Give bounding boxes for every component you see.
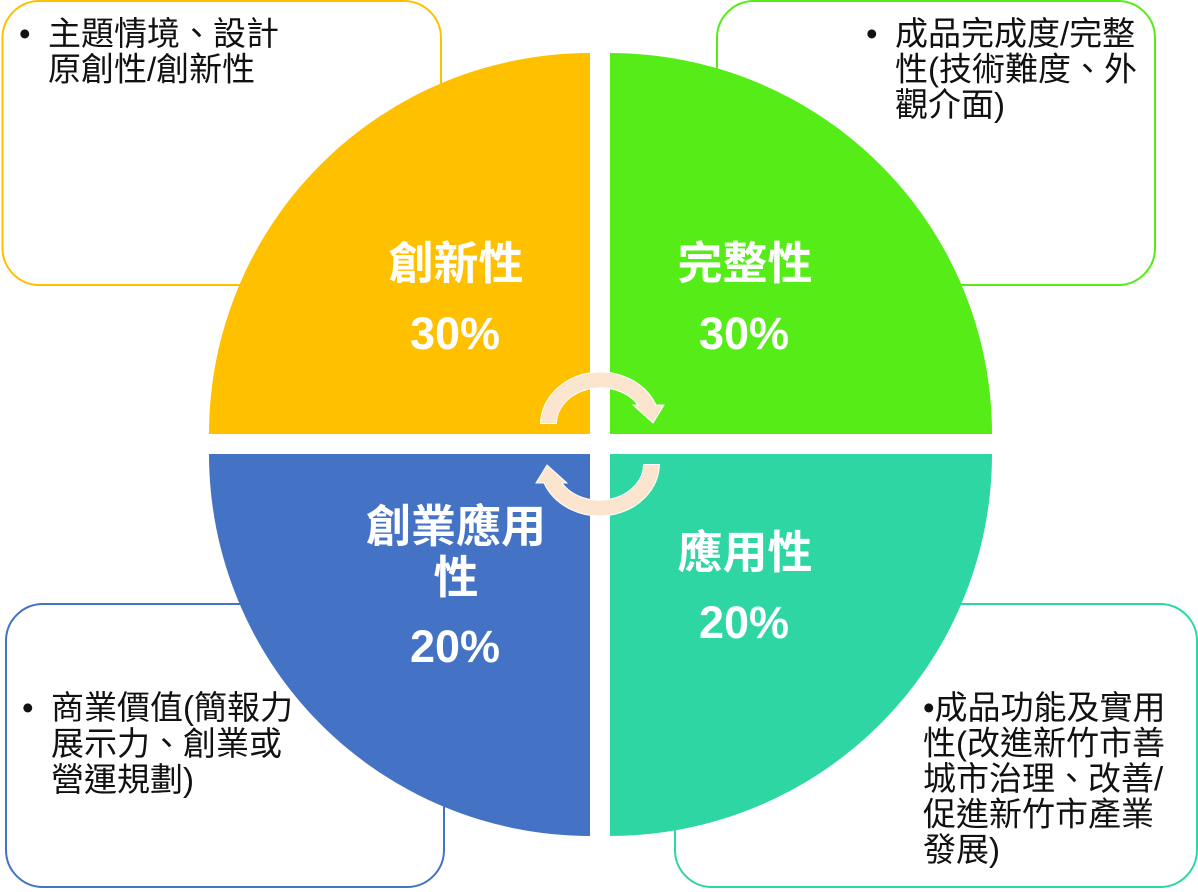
text: completeness criteria: 性(技術難度、外 — [895, 50, 1137, 88]
quadrant: innovation 30% — [209, 53, 590, 434]
arrow: bottom clockwise — [536, 464, 660, 516]
text: applicability criteria: 發展) — [923, 831, 1000, 868]
text: innovation criteria: 主題情境、設計 — [48, 15, 279, 52]
value: 20%: 20% — [699, 597, 789, 648]
label: completeness: 完整性 — [677, 238, 813, 289]
text: completeness criteria: 觀介面) — [895, 86, 1005, 123]
label: continuation: 性 — [433, 552, 479, 603]
text: applicability criteria: •成品功能及實用 — [923, 689, 1166, 726]
text: completeness criteria: • — [866, 15, 878, 52]
value: 30%: 30% — [410, 308, 500, 359]
text: business application criteria — [22, 689, 293, 798]
text: completeness criteria — [866, 15, 1137, 123]
label: applicability: 應用性 — [677, 527, 813, 578]
text: completeness criteria: 成品完成度/完整 — [895, 15, 1135, 52]
text: applicability criteria: 城市治理、改善/ — [923, 760, 1164, 797]
label: innovation: 創新性 — [388, 238, 524, 289]
quadrant: completeness 30% — [610, 53, 992, 434]
text: business application criteria: 展示力、創業或 — [51, 725, 282, 762]
text: applicability criteria: 性(改進新竹市善 — [923, 724, 1165, 762]
text: innovation criteria: 原創性/創新性 — [48, 50, 255, 88]
text: innovation criteria — [19, 15, 279, 88]
text: business application criteria: • — [22, 689, 34, 726]
text: business application criteria: 商業價值(簡報力 — [51, 689, 293, 726]
text: applicability criteria — [923, 689, 1166, 868]
quadrant: business application 20% — [209, 454, 590, 836]
value: 20%: 20% — [410, 621, 500, 672]
text: applicability criteria: 促進新竹市產業 — [923, 796, 1154, 832]
text: business application criteria: 營運規劃) — [51, 761, 194, 798]
arrow: top clockwise — [540, 372, 664, 424]
quadrant: applicability 20% — [610, 454, 992, 836]
text: innovation criteria: • — [19, 15, 31, 52]
panel: business application criteria — [6, 604, 444, 887]
panel: completeness criteria — [717, 1, 1155, 285]
panel: applicability criteria — [675, 604, 1197, 887]
panel: innovation criteria — [2, 1, 441, 285]
label: business application: 創業應用 — [366, 501, 546, 552]
value: 30%: 30% — [699, 308, 789, 359]
